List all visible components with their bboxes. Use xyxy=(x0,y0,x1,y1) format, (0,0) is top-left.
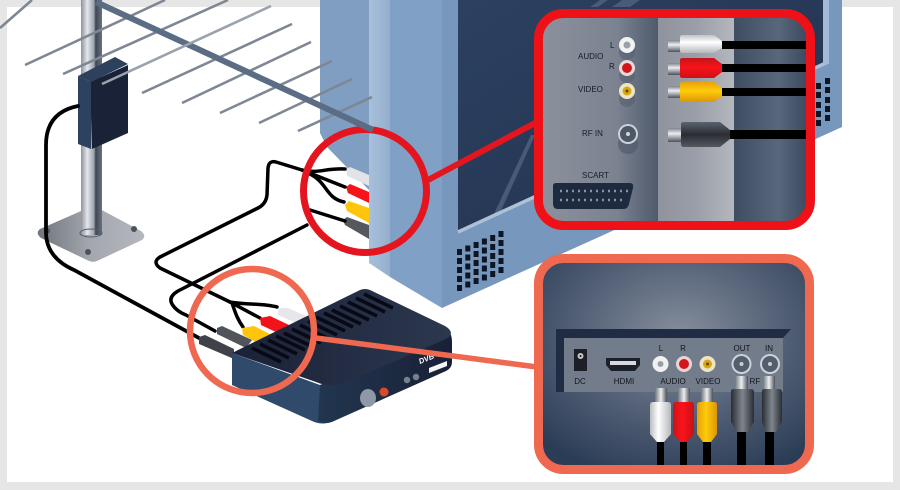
crossbar through box xyxy=(102,6,271,84)
grey plug xyxy=(343,217,369,239)
TV jack labels: RF IN xyxy=(582,129,603,138)
receiver-side plugs xyxy=(199,308,306,359)
panel sections xyxy=(541,16,808,223)
receiver labels: OUT xyxy=(734,344,751,353)
box top xyxy=(78,57,128,82)
cables xyxy=(156,162,345,331)
RF in jack xyxy=(760,354,780,374)
red connector line xyxy=(428,122,537,180)
coral panel border xyxy=(538,258,810,470)
RF in plug down xyxy=(762,376,782,466)
audio-video branches at TV xyxy=(302,169,345,202)
receiver labels: VIDEO xyxy=(696,377,720,386)
black receiver plug xyxy=(199,335,234,359)
receiver rear: top band xyxy=(556,329,791,338)
red plug down xyxy=(673,388,694,466)
red plug and cable xyxy=(668,58,806,78)
TV front frame xyxy=(442,0,842,308)
right section xyxy=(734,16,808,223)
box left face xyxy=(78,76,91,149)
crossbars xyxy=(0,0,372,131)
box top xyxy=(232,289,451,385)
red zoom circle xyxy=(304,130,426,252)
TV screen xyxy=(458,0,823,232)
TV jack labels: AUDIO xyxy=(578,52,603,61)
receiver labels xyxy=(574,344,773,386)
antenna cable xyxy=(46,106,199,338)
USB port xyxy=(429,361,447,373)
indicator light xyxy=(380,388,388,396)
panel: receiver connectors xyxy=(538,258,810,470)
white jack xyxy=(652,356,668,372)
coral connector line xyxy=(316,338,537,367)
receiver labels: AUDIO xyxy=(660,377,686,386)
grey receiver plug xyxy=(217,326,252,348)
screen lower highlight xyxy=(458,62,828,232)
RF cable xyxy=(171,225,307,331)
receiver labels: RF xyxy=(750,377,760,386)
DVB logo: DVB xyxy=(417,351,436,366)
TV front speaker grille xyxy=(457,231,504,291)
white audio jack xyxy=(619,37,635,60)
receiver labels: DC xyxy=(574,377,586,386)
antenna boom end xyxy=(355,122,373,130)
TV jack labels: L xyxy=(610,41,615,50)
coral zoom circle xyxy=(190,269,314,393)
red plug xyxy=(346,184,369,203)
TV jack labels xyxy=(578,41,615,180)
box side face xyxy=(232,353,372,424)
red jack xyxy=(676,356,692,372)
TV right speaker grille xyxy=(816,78,830,126)
right bezel highlight xyxy=(823,0,829,64)
SCART socket xyxy=(553,183,633,209)
yellow jack xyxy=(700,356,716,372)
receiver labels: L xyxy=(659,344,664,353)
TV side face xyxy=(390,0,442,308)
mast collar xyxy=(80,229,102,237)
set-top box xyxy=(232,289,452,424)
TV jack labels: VIDEO xyxy=(578,85,603,94)
plate bolts xyxy=(44,226,137,255)
receiver labels: HDMI xyxy=(614,377,634,386)
panel background xyxy=(541,261,808,468)
small buttons xyxy=(404,374,419,383)
box front face xyxy=(318,330,452,423)
power button xyxy=(360,389,376,407)
left section xyxy=(541,16,658,223)
yellow plug down xyxy=(697,388,717,466)
white plug xyxy=(346,167,369,186)
RF stub at TV xyxy=(310,210,345,221)
yellow plug xyxy=(345,201,369,223)
red receiver plug xyxy=(260,316,289,333)
box front xyxy=(90,65,128,149)
RF plug and cable xyxy=(668,122,806,147)
TV jack labels: R xyxy=(609,62,615,71)
DC socket xyxy=(574,349,587,371)
middle section xyxy=(658,16,734,223)
RF jack xyxy=(618,124,638,154)
antenna boom xyxy=(96,2,373,130)
white plug and cable xyxy=(668,35,806,53)
antenna mast xyxy=(81,0,102,235)
amplifier box xyxy=(78,57,128,149)
screen reflection xyxy=(493,0,640,216)
yellow plug and cable xyxy=(668,82,806,102)
television xyxy=(320,0,842,308)
yellow receiver plug xyxy=(242,326,272,344)
HDMI socket xyxy=(606,358,640,371)
receiver rear: left wedge xyxy=(556,329,564,392)
TV side strip xyxy=(369,0,390,277)
receiver labels: IN xyxy=(765,344,773,353)
RF out plug down xyxy=(731,376,754,466)
panel: TV connectors xyxy=(538,14,810,226)
antenna xyxy=(0,0,373,262)
white plug down xyxy=(650,388,671,466)
yellow video jack xyxy=(619,83,635,107)
red audio jack xyxy=(619,60,635,83)
audio-video cable xyxy=(156,162,302,302)
TV jack labels: SCART xyxy=(582,171,609,180)
mounting plate xyxy=(38,207,144,262)
vent slats xyxy=(252,294,393,362)
TV rear panel xyxy=(320,0,372,193)
white receiver plug xyxy=(278,308,306,323)
RF out jack xyxy=(732,354,752,374)
TV-side plugs xyxy=(343,167,369,239)
receiver labels: R xyxy=(680,344,686,353)
audio-video branches at receiver xyxy=(230,302,277,327)
receiver rear: panel xyxy=(564,338,783,392)
red panel border xyxy=(538,14,810,226)
